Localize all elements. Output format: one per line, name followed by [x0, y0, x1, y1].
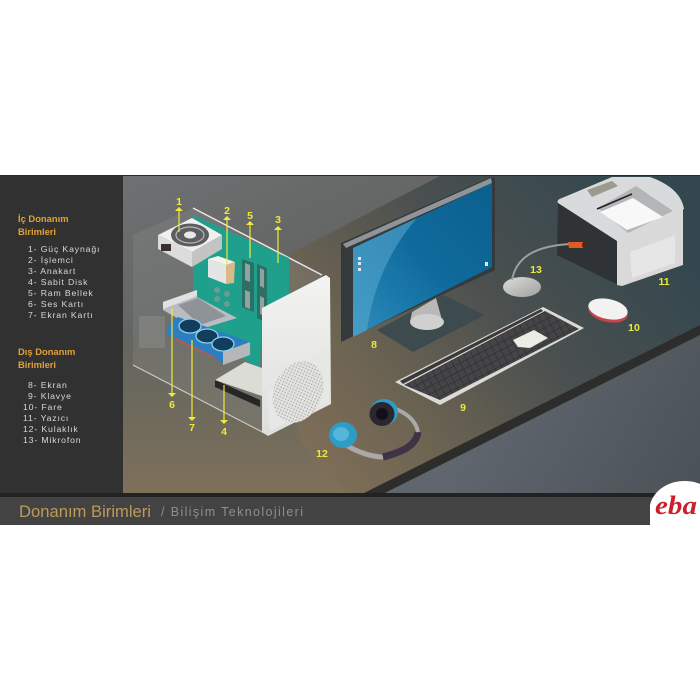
hardware callouts: 1 [176, 196, 182, 208]
keyboard [395, 307, 584, 405]
hardware callouts: 4 [221, 426, 227, 438]
monitor [341, 177, 495, 352]
hardware callouts: 2 [224, 205, 230, 217]
hardware callouts: 6 [169, 399, 175, 411]
mouse [586, 295, 630, 326]
power supply [158, 218, 222, 267]
printer [557, 177, 684, 286]
list: internal hardware [28, 244, 100, 320]
sound card [163, 290, 237, 330]
hardware callouts [168, 196, 282, 438]
panel: hardware legend [0, 176, 123, 493]
computer case [133, 208, 333, 436]
list: external hardware: 8- Ekran [28, 380, 68, 390]
microphone [503, 242, 586, 297]
hardware callouts: 5 [247, 210, 253, 222]
hard disk [215, 362, 262, 407]
list: external hardware: 9- Klavye [28, 391, 72, 401]
infographic background [0, 175, 700, 525]
ram modules [242, 259, 267, 323]
list: external hardware: 12- Kulaklık [23, 424, 79, 434]
headphones label: 12 [316, 448, 328, 460]
heading: internal hardware: İç Donanım [18, 213, 69, 224]
list: internal hardware: 6- Ses Kartı [28, 299, 84, 309]
graphics card [168, 317, 250, 365]
motherboard sockets [214, 287, 230, 307]
hardware callouts: 7 [189, 422, 195, 434]
processor [208, 256, 235, 284]
list: external hardware: 10- Fare [23, 402, 63, 412]
footer separator and subject: / Bilişim Teknolojileri [161, 505, 303, 519]
list: internal hardware: 7- Ekran Kartı [28, 310, 94, 320]
heading: external hardware: Dış Donanım [18, 346, 75, 357]
microphone label: 13 [530, 264, 542, 276]
footer bar [0, 493, 700, 525]
logo: eba [650, 481, 700, 525]
list: external hardware: 11- Yazıcı [23, 413, 69, 423]
heading: internal hardware: Birimleri [18, 226, 56, 237]
list: internal hardware: 2- İşlemci [28, 255, 74, 265]
keyboard label: 9 [460, 402, 466, 414]
printer label: 11 [658, 276, 670, 288]
mouse label: 10 [628, 322, 640, 334]
list: internal hardware: 4- Sabit Disk [28, 277, 88, 287]
logo: eba: eba [655, 491, 697, 520]
monitor label: 8 [371, 339, 377, 351]
footer title: Donanım Birimleri [19, 503, 151, 521]
list: internal hardware: 1- Güç Kaynağı [28, 244, 100, 254]
front panel [262, 275, 333, 436]
list: external hardware: 13- Mikrofon [23, 435, 81, 445]
heading: external hardware: Birimleri [18, 359, 56, 370]
hardware callouts: 3 [275, 214, 281, 226]
list: internal hardware: 3- Anakart [28, 266, 76, 276]
list: external hardware [23, 380, 81, 445]
motherboard [193, 215, 289, 368]
headphones [329, 399, 418, 457]
list: internal hardware: 5- Ram Bellek [28, 288, 94, 298]
